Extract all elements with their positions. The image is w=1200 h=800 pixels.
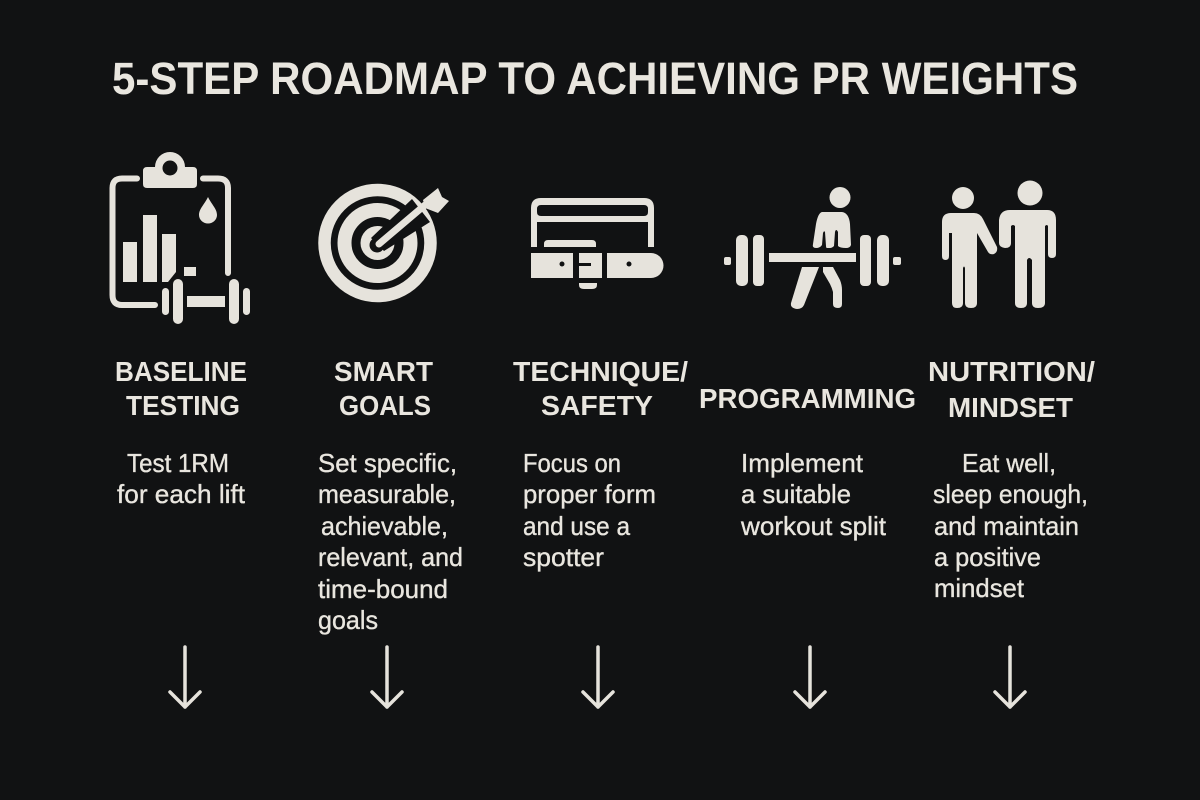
arrow: down	[372, 647, 402, 707]
text: smart goals description: goals	[318, 605, 378, 635]
text: smart goals description: relevant, and	[318, 542, 463, 572]
text: nutrition description: sleep enough,	[933, 479, 1088, 509]
text: technique description: Focus on	[523, 448, 621, 478]
text: programming description: Implement	[741, 448, 864, 478]
panel: step 4 programming	[699, 187, 916, 707]
text: nutrition description: a positive	[934, 542, 1041, 572]
heading: smart goals: GOALS	[339, 390, 431, 421]
text: baseline description	[117, 448, 246, 509]
heading: technique and safety: SAFETY	[541, 390, 653, 421]
heading: nutrition and mindset	[928, 356, 1095, 423]
icon: lifting belt	[531, 198, 664, 289]
text: technique description	[523, 448, 656, 572]
text: baseline description: for each lift	[117, 479, 246, 509]
icon: clipboard with chart and dumbbell	[112, 152, 250, 324]
arrow: down	[795, 647, 825, 707]
heading: nutrition and mindset: NUTRITION/	[928, 356, 1095, 387]
title: 5-STEP ROADMAP TO ACHIEVING PR WEIGHTS	[112, 53, 1078, 104]
heading: programming: PROGRAMMING	[699, 383, 916, 414]
panel: step 3 technique and safety	[513, 198, 688, 707]
panel: step 5 nutrition and mindset	[928, 180, 1095, 707]
text: smart goals description: time-bound	[318, 574, 448, 604]
text: programming description: workout split	[740, 511, 887, 541]
heading: baseline testing: TESTING	[126, 390, 240, 421]
text: smart goals description	[318, 448, 463, 635]
panel: step 2 smart goals	[318, 188, 463, 707]
arrow: down	[995, 647, 1025, 707]
text: programming description: a suitable	[741, 479, 851, 509]
text: nutrition description	[933, 448, 1088, 603]
icon: two people	[942, 180, 1056, 308]
heading: technique and safety: TECHNIQUE/	[513, 356, 688, 387]
text: smart goals description: Set specific,	[318, 448, 457, 478]
heading: smart goals	[334, 356, 433, 421]
text: nutrition description: mindset	[934, 573, 1025, 603]
heading: smart goals: SMART	[334, 356, 433, 387]
text: baseline description: Test 1RM	[127, 448, 229, 478]
text: nutrition description: Eat well,	[962, 448, 1056, 478]
heading: technique and safety	[513, 356, 688, 421]
heading: baseline testing: BASELINE	[115, 356, 247, 387]
text: technique description: and use a	[523, 511, 630, 541]
text: technique description: proper form	[523, 479, 656, 509]
icon: target with arrow	[324, 188, 449, 296]
text: programming description	[740, 448, 887, 541]
icon: deadlifter with barbell	[724, 187, 901, 309]
panel: step 1 baseline testing	[112, 152, 250, 707]
text: technique description: spotter	[523, 542, 604, 572]
arrow: down	[170, 647, 200, 707]
text: smart goals description: measurable,	[318, 479, 456, 509]
text: nutrition description: and maintain	[934, 511, 1079, 541]
text: smart goals description: achievable,	[321, 511, 448, 541]
heading: baseline testing	[115, 356, 247, 421]
arrow: down	[583, 647, 613, 707]
heading: nutrition and mindset: MINDSET	[948, 392, 1073, 423]
